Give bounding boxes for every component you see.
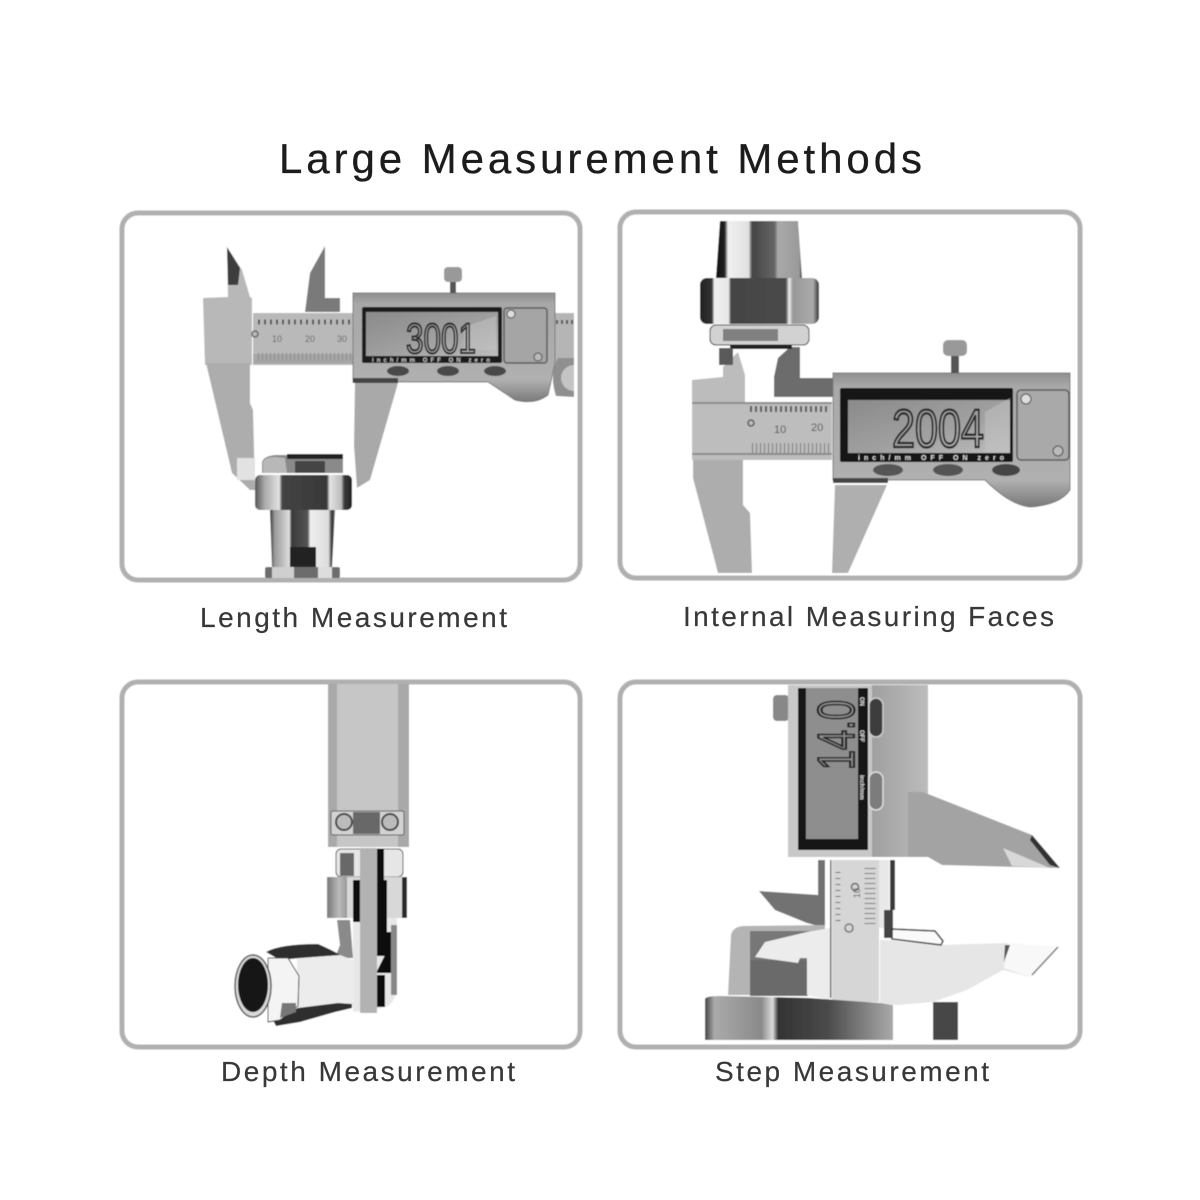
icon: depth scale beam [825,860,895,1002]
icon: screws [336,814,398,830]
LCD reading: 3001 [406,315,476,363]
side branch [335,920,353,958]
icon: caliper upper moving jaw [774,347,833,397]
horizontal body [297,955,353,1018]
icon: caliper fixed jaws and beam: 30 [337,334,347,344]
panel: depth measurement [122,682,580,1047]
icon: locking knob [773,695,789,721]
icon: locking knob [943,340,967,373]
icon: caliper lower moving jaw [832,485,887,573]
LCD reading: 14.0 [808,700,866,770]
icon: caliper lower moving jaw [354,383,398,488]
LCD button labels: ON [858,697,864,706]
icon: depth scale beam: 10 [852,888,862,898]
icon: elbow pipe fitting [235,848,407,1026]
vertical tube [327,848,407,1013]
caption: length measurement: Length Measurement [200,602,507,633]
icon: pipe fitting [700,221,819,365]
icon: caliper fixed jaws and beam: 20 [305,334,315,344]
unit label: inch/mm [858,775,864,800]
title: Large Measurement Methods [279,135,924,182]
LCD reading: 2004 [892,399,984,459]
icon: caliper fixed jaws and beam: 10 [774,424,786,436]
icon: stepped fitting [728,925,825,996]
LCD button labels: inch/mm OFF ON zero [858,455,1004,462]
icon: caliper upper moving jaw [305,246,340,312]
icon: small left jaw [759,860,826,928]
panel: step measurement [620,682,1080,1047]
icon: lower bright jaw [755,928,1058,1005]
icon: pipe fitting [255,454,352,578]
icon: base fitting [705,996,958,1040]
icon: buttons [869,698,883,810]
icon: caliper upper right jaw [908,792,1060,868]
hex nut [268,958,299,1022]
icon: caliper fixed jaws and beam: 20 [811,422,823,434]
icon: right beam and wheel [553,313,574,397]
icon: digital display housing [788,685,928,857]
panel: internal measuring faces [620,212,1080,578]
icon: digital display housing [833,373,1070,507]
icon: caliper fixed jaws and beam: 10 [272,334,282,344]
LCD button labels: inch/mm OFF ON zero [372,358,490,364]
icon: locking knob [444,267,462,293]
opening [235,955,271,1017]
icon: digital display housing [353,293,555,402]
caption: depth measurement: Depth Measurement [221,1056,515,1087]
caption: internal measuring faces: Internal Measuring Faces [683,601,1054,632]
panel: length measurement [122,213,580,580]
icon: caliper fixed jaws and beam [203,247,354,490]
icon: caliper fixed jaws and beam [692,352,832,573]
caption: step measurement: Step Measurement [715,1056,989,1087]
icon: depth rod [328,684,409,847]
OFF label: OFF [858,730,864,742]
